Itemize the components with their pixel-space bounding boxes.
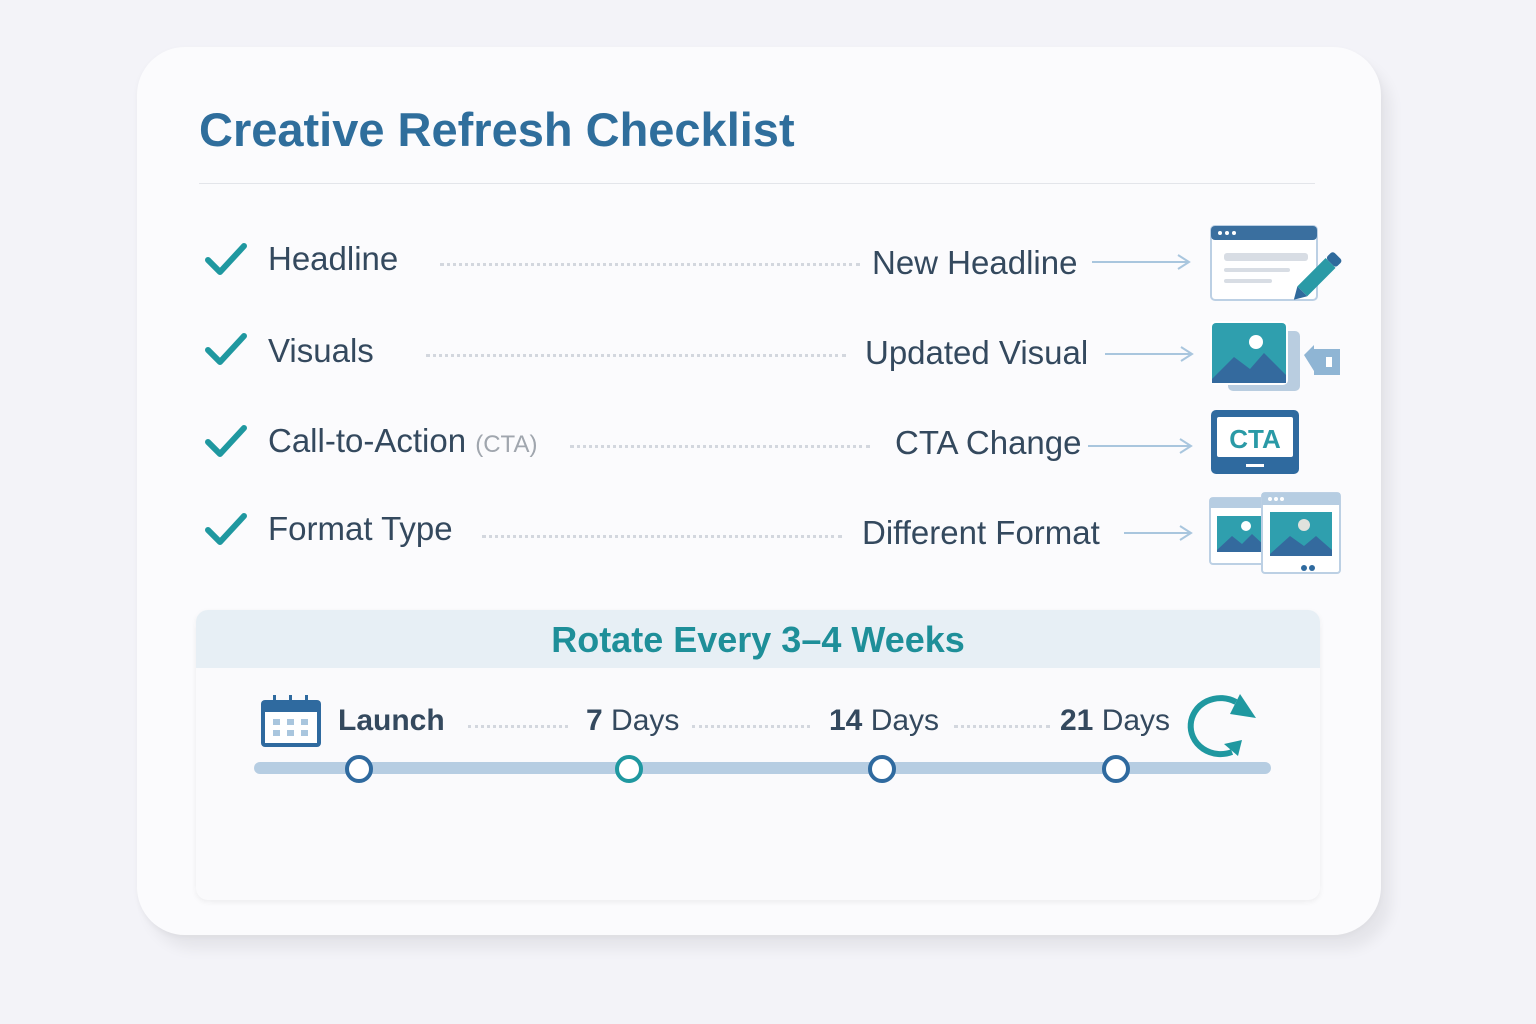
icon: calendar <box>261 695 321 747</box>
result label: New Headline <box>872 244 1077 281</box>
arrow <box>1105 346 1194 362</box>
icon: CTA screen <box>1211 410 1299 474</box>
icon: check <box>205 333 247 365</box>
panel: rotation timeline: 14 Days <box>829 704 939 737</box>
icon: CTA screen: CTA <box>1229 424 1281 454</box>
markers <box>345 755 373 783</box>
icon: browser with pencil <box>1210 225 1342 301</box>
icon: image swap <box>1212 323 1340 391</box>
row: visuals <box>205 323 1340 391</box>
icon: refresh <box>1188 694 1256 758</box>
arrow <box>1088 438 1193 454</box>
title: Creative Refresh Checklist <box>199 103 795 156</box>
row: headline <box>205 225 1342 301</box>
icon: check <box>205 243 247 275</box>
label: Headline <box>268 240 398 277</box>
row: format <box>205 492 1341 574</box>
result label: Updated Visual <box>865 334 1088 371</box>
card <box>137 47 1381 935</box>
heading bar: Rotate Every 3–4 Weeks <box>551 619 965 660</box>
milestone labels: Launch <box>338 704 445 737</box>
panel: rotation timeline: 7 Days <box>586 704 679 737</box>
icon: multi format <box>1209 492 1341 574</box>
row: cta <box>205 410 1299 474</box>
label: Format Type <box>268 510 453 547</box>
icon: check <box>205 425 247 457</box>
arrow <box>1124 525 1193 541</box>
icon: check <box>205 513 247 545</box>
result label: Different Format <box>862 514 1100 551</box>
arrow <box>1092 254 1191 270</box>
result label: CTA Change <box>895 424 1082 461</box>
label: Visuals <box>268 332 374 369</box>
heading bar <box>196 610 1320 668</box>
timeline bar <box>254 762 1271 774</box>
panel: rotation timeline: 21 Days <box>1060 704 1170 737</box>
label: Call-to-Action (CTA) <box>268 422 537 459</box>
panel: rotation timeline <box>196 610 1320 900</box>
